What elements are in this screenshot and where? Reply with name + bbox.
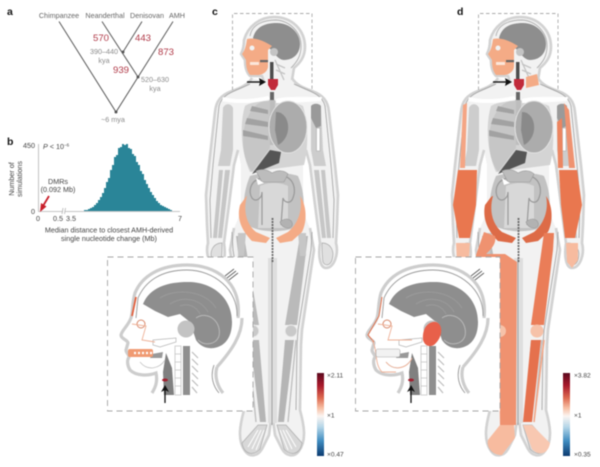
colour scale c bbox=[317, 372, 344, 458]
orange facial structures bbox=[128, 297, 155, 357]
panel letter b: b bbox=[7, 136, 13, 148]
face detail bbox=[496, 46, 514, 65]
species labels bbox=[39, 11, 185, 20]
orange limb bones bbox=[453, 103, 582, 455]
panel: histogram of simulations bbox=[7, 136, 182, 243]
icon: inset arrow bbox=[407, 385, 415, 403]
species labels: AMH bbox=[169, 11, 185, 20]
DMR counts: 939 bbox=[113, 65, 129, 76]
histogram bars bbox=[84, 144, 172, 211]
divergence times: 390–440 bbox=[90, 47, 118, 56]
colour scale d bbox=[563, 372, 591, 458]
inset: head detail bbox=[108, 257, 253, 411]
x axis tick labels: 0.5 bbox=[53, 214, 63, 223]
icon: red arrow bbox=[40, 196, 49, 212]
colour scale d: ×1 bbox=[574, 412, 582, 420]
panel: body map d bbox=[356, 6, 591, 458]
orange face and neck bbox=[488, 38, 539, 88]
icon: inset arrow bbox=[161, 385, 169, 403]
panel: phylogenetic tree bbox=[7, 6, 185, 124]
axes bbox=[38, 144, 180, 214]
colour scale c: ×0.47 bbox=[327, 452, 344, 458]
body skeleton bbox=[452, 17, 584, 455]
x axis title: single nucleotide change (Mb) bbox=[61, 234, 157, 243]
species labels: Denisovan bbox=[130, 11, 164, 20]
y axis labels: simulations bbox=[15, 161, 24, 197]
divergence times: ~6 mya bbox=[101, 115, 125, 124]
panel letter a: a bbox=[7, 6, 13, 18]
x axis title: Median distance to closest AMH-derived bbox=[45, 226, 173, 234]
y axis labels: 0 bbox=[31, 207, 35, 216]
tree branches bbox=[59, 22, 173, 113]
thyroid in inset bbox=[162, 378, 168, 382]
colour scale c: ×2.11 bbox=[327, 372, 344, 380]
body skeleton bbox=[206, 17, 338, 455]
DMR counts bbox=[93, 33, 174, 76]
thyroid bbox=[514, 79, 524, 90]
p-value: P < 10 bbox=[43, 142, 64, 151]
p-value: −6 bbox=[64, 142, 70, 148]
DMR counts: 443 bbox=[135, 33, 151, 44]
hair ticks bbox=[225, 269, 238, 280]
species labels: Chimpanzee bbox=[39, 11, 79, 20]
y axis labels bbox=[7, 141, 35, 216]
thyroid bbox=[268, 79, 278, 90]
DMR callout bbox=[41, 177, 75, 194]
panel letter c: c bbox=[212, 6, 218, 18]
panel letter d: d bbox=[457, 6, 463, 18]
orange face and pelvis regions bbox=[239, 38, 306, 243]
colour scale d: ×3.82 bbox=[574, 372, 591, 380]
species labels: Neanderthal bbox=[85, 11, 125, 20]
divergence times: kya bbox=[149, 84, 161, 93]
dashed head box bbox=[232, 14, 312, 90]
x axis tick labels: 7 bbox=[178, 214, 182, 223]
dashed head box bbox=[478, 14, 558, 90]
colour scale d: ×0.35 bbox=[574, 452, 591, 458]
hair ticks bbox=[471, 269, 484, 280]
icon: black arrow bbox=[493, 78, 512, 86]
DMR callout: (0.092 Mb) bbox=[41, 185, 75, 194]
orange facial structures bbox=[368, 297, 412, 372]
panel: body map c bbox=[108, 6, 344, 458]
y axis labels: Number of bbox=[7, 162, 16, 196]
icon: black arrow bbox=[247, 78, 266, 86]
divergence times: kya bbox=[98, 56, 110, 65]
DMR counts: 570 bbox=[93, 33, 109, 44]
face detail bbox=[250, 46, 268, 65]
x axis tick labels bbox=[36, 214, 182, 223]
divergence times: 520–630 bbox=[141, 75, 169, 84]
colour scale c: ×1 bbox=[327, 412, 335, 420]
inset: head detail bbox=[356, 257, 500, 411]
DMR callout: DMRs bbox=[48, 177, 68, 186]
x axis tick labels: 0 bbox=[36, 214, 40, 223]
x axis title bbox=[45, 226, 173, 243]
x axis tick labels: 3.5 bbox=[66, 214, 76, 223]
divergence times bbox=[90, 47, 169, 124]
thyroid in inset bbox=[408, 378, 414, 382]
y axis labels: 450 bbox=[23, 141, 35, 150]
DMR counts: 873 bbox=[158, 47, 174, 58]
orange ear bbox=[423, 322, 441, 346]
